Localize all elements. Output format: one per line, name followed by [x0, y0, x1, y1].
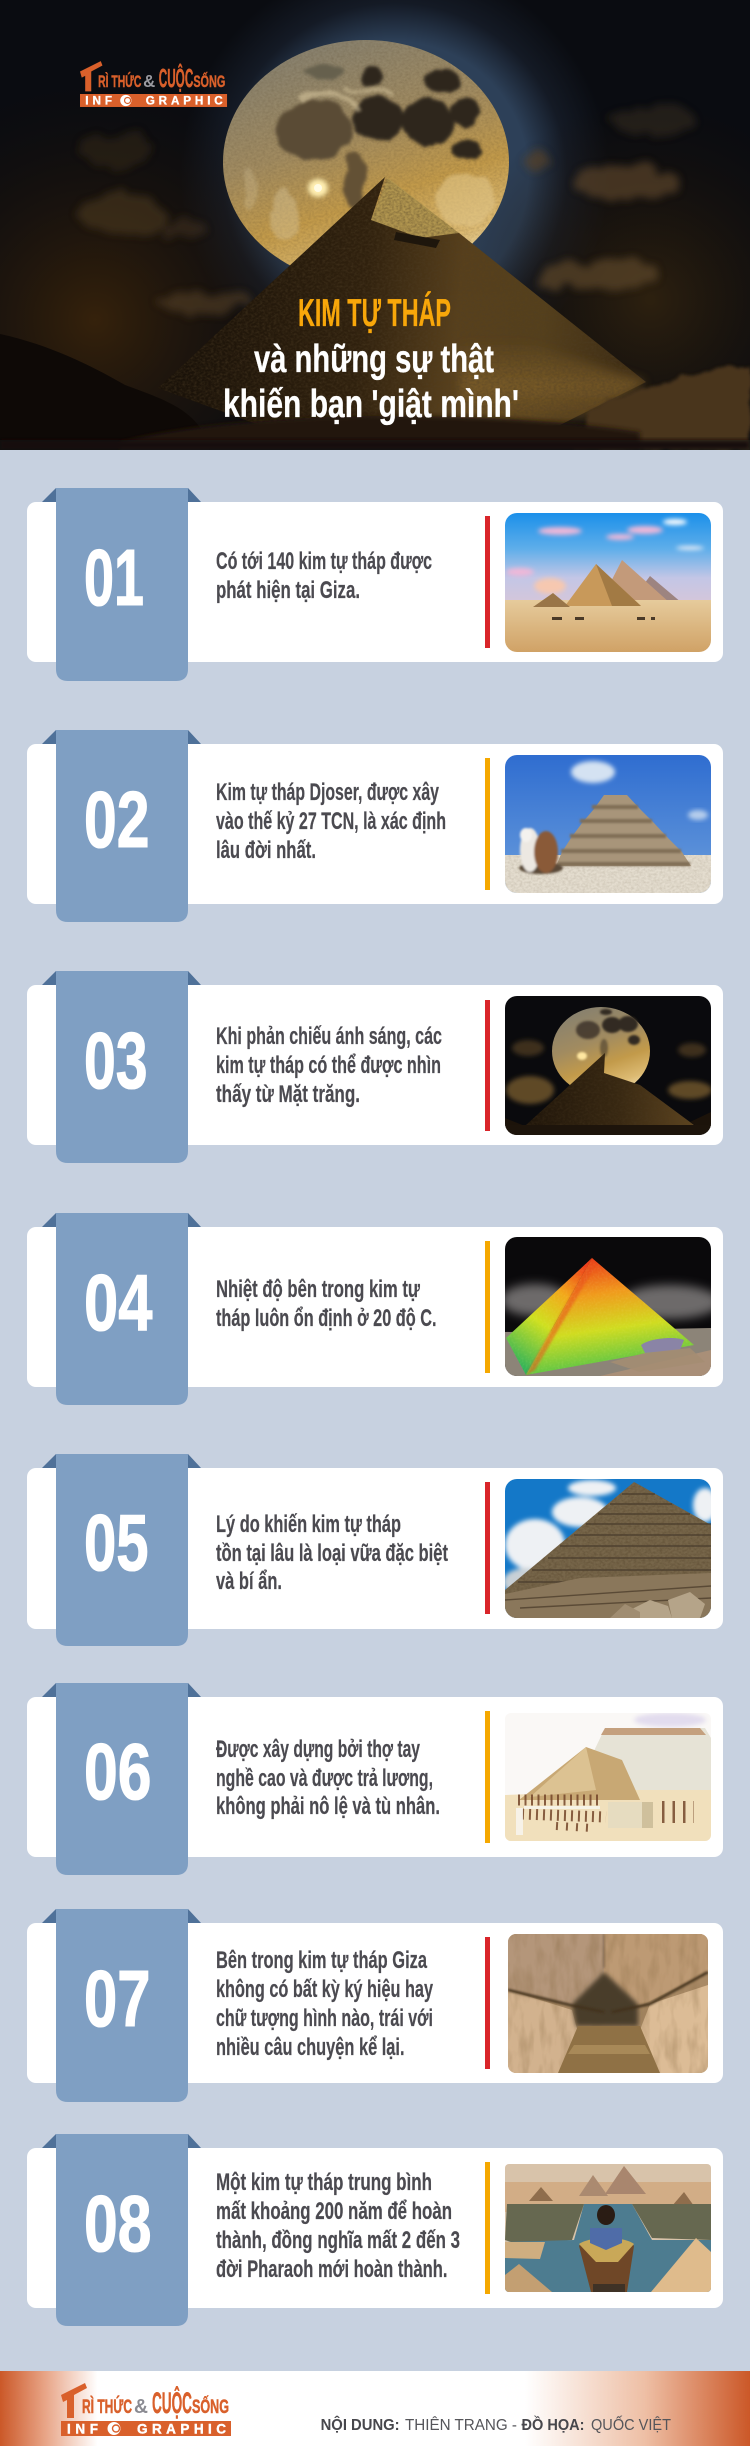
- number: 03: [84, 1016, 148, 1105]
- card background: [27, 1923, 723, 2083]
- text block: và bí ẩn.: [216, 1568, 282, 1595]
- logo: footer: CUỘC: [152, 2386, 192, 2420]
- ribbon: [42, 1454, 201, 1646]
- panel: fact 08: [27, 2134, 723, 2326]
- ribbon: [42, 1213, 201, 1405]
- hero moon: [223, 40, 509, 284]
- text block: Kim tự tháp Djoser, được xây: [216, 779, 439, 806]
- pharaoh figure: [579, 2205, 634, 2292]
- card background: [27, 502, 723, 662]
- text block: không có bất kỳ ký hiệu hay: [216, 1976, 433, 2003]
- card background: [27, 1697, 723, 1857]
- text block: Một kim tự tháp trung bình: [216, 2169, 432, 2196]
- number: 05: [84, 1498, 149, 1587]
- logo: hero: CUỘC: [159, 63, 193, 93]
- photo: thermal scan of pyramid: [501, 1237, 720, 1376]
- text block: đời Pharaoh mới hoàn thành.: [216, 2256, 448, 2283]
- hero pyramid: [150, 170, 660, 440]
- text block: [216, 1736, 440, 1820]
- number: 04: [84, 1258, 153, 1347]
- text block: thành, đồng nghĩa mất 2 đến 3: [216, 2227, 460, 2254]
- photo: pyramid and moon: [505, 996, 712, 1135]
- photo: workers building pyramid: [505, 1713, 711, 1841]
- panel: fact 01: [27, 488, 723, 681]
- hero title: và những sự thật: [254, 338, 494, 381]
- credits: NỘI DUNG:: [321, 2415, 400, 2434]
- text block: Có tới 140 kim tự tháp được: [216, 548, 432, 575]
- ribbon: [42, 1909, 201, 2102]
- ribbon: [42, 971, 201, 1163]
- logo: hero: GRAPHIC: [146, 95, 223, 108]
- number: 02: [84, 775, 150, 864]
- photo: step pyramid of Djoser with camel: [505, 755, 711, 893]
- text block: nhiều câu chuyện kể lại.: [216, 2034, 404, 2061]
- card background: [27, 985, 723, 1145]
- logo: hero: SỐNG: [193, 71, 225, 91]
- panel: fact 02: [27, 730, 723, 922]
- panel: fact 05: [27, 1454, 723, 1646]
- logo: hero: [80, 61, 227, 108]
- logo: footer: SỐNG: [192, 2396, 229, 2418]
- text block: Được xây dựng bởi thợ tay: [216, 1736, 420, 1763]
- footer band: [0, 2371, 750, 2446]
- credits: QUỐC VIỆT: [591, 2414, 671, 2434]
- card background: [27, 744, 723, 904]
- text block: [216, 779, 446, 864]
- number: 07: [84, 1954, 150, 2043]
- accent bar: [485, 1241, 490, 1373]
- number: 01: [84, 533, 144, 622]
- hero night sky: [0, 0, 750, 450]
- panel: fact 03: [27, 971, 723, 1163]
- text block: [216, 548, 432, 604]
- text block: [216, 1276, 436, 1332]
- text block: [216, 1511, 448, 1595]
- text block: thấy từ Mặt trăng.: [216, 1081, 360, 1108]
- text block: Nhiệt độ bên trong kim tự: [216, 1276, 420, 1303]
- photo: pyramid blocks against cloudy sky: [503, 1479, 717, 1618]
- logo: footer: INF: [67, 2421, 98, 2436]
- credits: ĐỒ HỌA:: [522, 2415, 584, 2434]
- ribbon: [42, 1683, 201, 1875]
- number: 08: [84, 2179, 152, 2268]
- text block: nghề cao và được trả lương,: [216, 1765, 433, 1792]
- logo: hero: RÌ THỨC: [98, 72, 142, 91]
- text block: kim tự tháp có thể được nhìn: [216, 1052, 441, 1079]
- logo: footer: GRAPHIC: [137, 2421, 226, 2436]
- text block: [216, 2169, 460, 2283]
- card background: [27, 1468, 723, 1629]
- text block: tồn tại lâu là loại vữa đặc biệt: [216, 1540, 448, 1567]
- logo: hero: &: [143, 71, 155, 91]
- text block: lâu đời nhất.: [216, 837, 316, 864]
- card background: [27, 2148, 723, 2308]
- number: 06: [84, 1727, 152, 1816]
- accent bar: [485, 1482, 490, 1614]
- text block: Lý do khiến kim tự tháp: [216, 1511, 401, 1538]
- logo: footer: &: [134, 2396, 148, 2418]
- photo: Giza pyramids in desert: [505, 513, 711, 652]
- ribbon: [42, 730, 201, 922]
- hero title: [223, 291, 519, 426]
- accent bar: [485, 1937, 490, 2069]
- logo: footer: [61, 2383, 231, 2436]
- credits: THIÊN TRANG -: [405, 2415, 517, 2434]
- ribbon: [42, 2134, 201, 2326]
- text block: vào thế kỷ 27 TCN, là xác định: [216, 808, 446, 835]
- panel: fact 06: [27, 1683, 723, 1875]
- text block: Bên trong kim tự tháp Giza: [216, 1947, 427, 1974]
- accent bar: [485, 2162, 490, 2294]
- accent bar: [485, 516, 490, 648]
- accent bar: [485, 758, 490, 890]
- hero banner: [0, 0, 750, 450]
- accent bar: [485, 1711, 490, 1843]
- panel: fact 04: [27, 1213, 723, 1405]
- panel: fact 07: [27, 1909, 723, 2102]
- text block: phát hiện tại Giza.: [216, 577, 360, 604]
- photo: pyramid interior corridor: [508, 1934, 708, 2073]
- ribbon: [42, 488, 201, 681]
- hero title: KIM TỰ THÁP: [298, 291, 451, 335]
- text block: tháp luôn ổn định ở 20 độ C.: [216, 1305, 436, 1332]
- card background: [27, 1227, 723, 1387]
- accent bar: [485, 1000, 490, 1131]
- text block: mất khoảng 200 năm để hoàn: [216, 2198, 452, 2225]
- text block: chữ tượng hình nào, trái với: [216, 2005, 433, 2032]
- text block: [216, 1947, 433, 2061]
- text block: [216, 1023, 442, 1108]
- logo: footer: RÌ THỨC: [82, 2396, 132, 2418]
- logo: hero: INF: [85, 95, 112, 108]
- text block: không phải nô lệ và tù nhân.: [216, 1793, 440, 1820]
- credits: [321, 2414, 671, 2434]
- photo: pharaoh overlooking pyramids: [505, 2164, 711, 2292]
- hero foreground dunes: [0, 334, 750, 450]
- text block: Khi phản chiếu ánh sáng, các: [216, 1023, 442, 1050]
- hero title: khiến bạn 'giật mình': [223, 383, 519, 426]
- hero clouds: [79, 105, 694, 313]
